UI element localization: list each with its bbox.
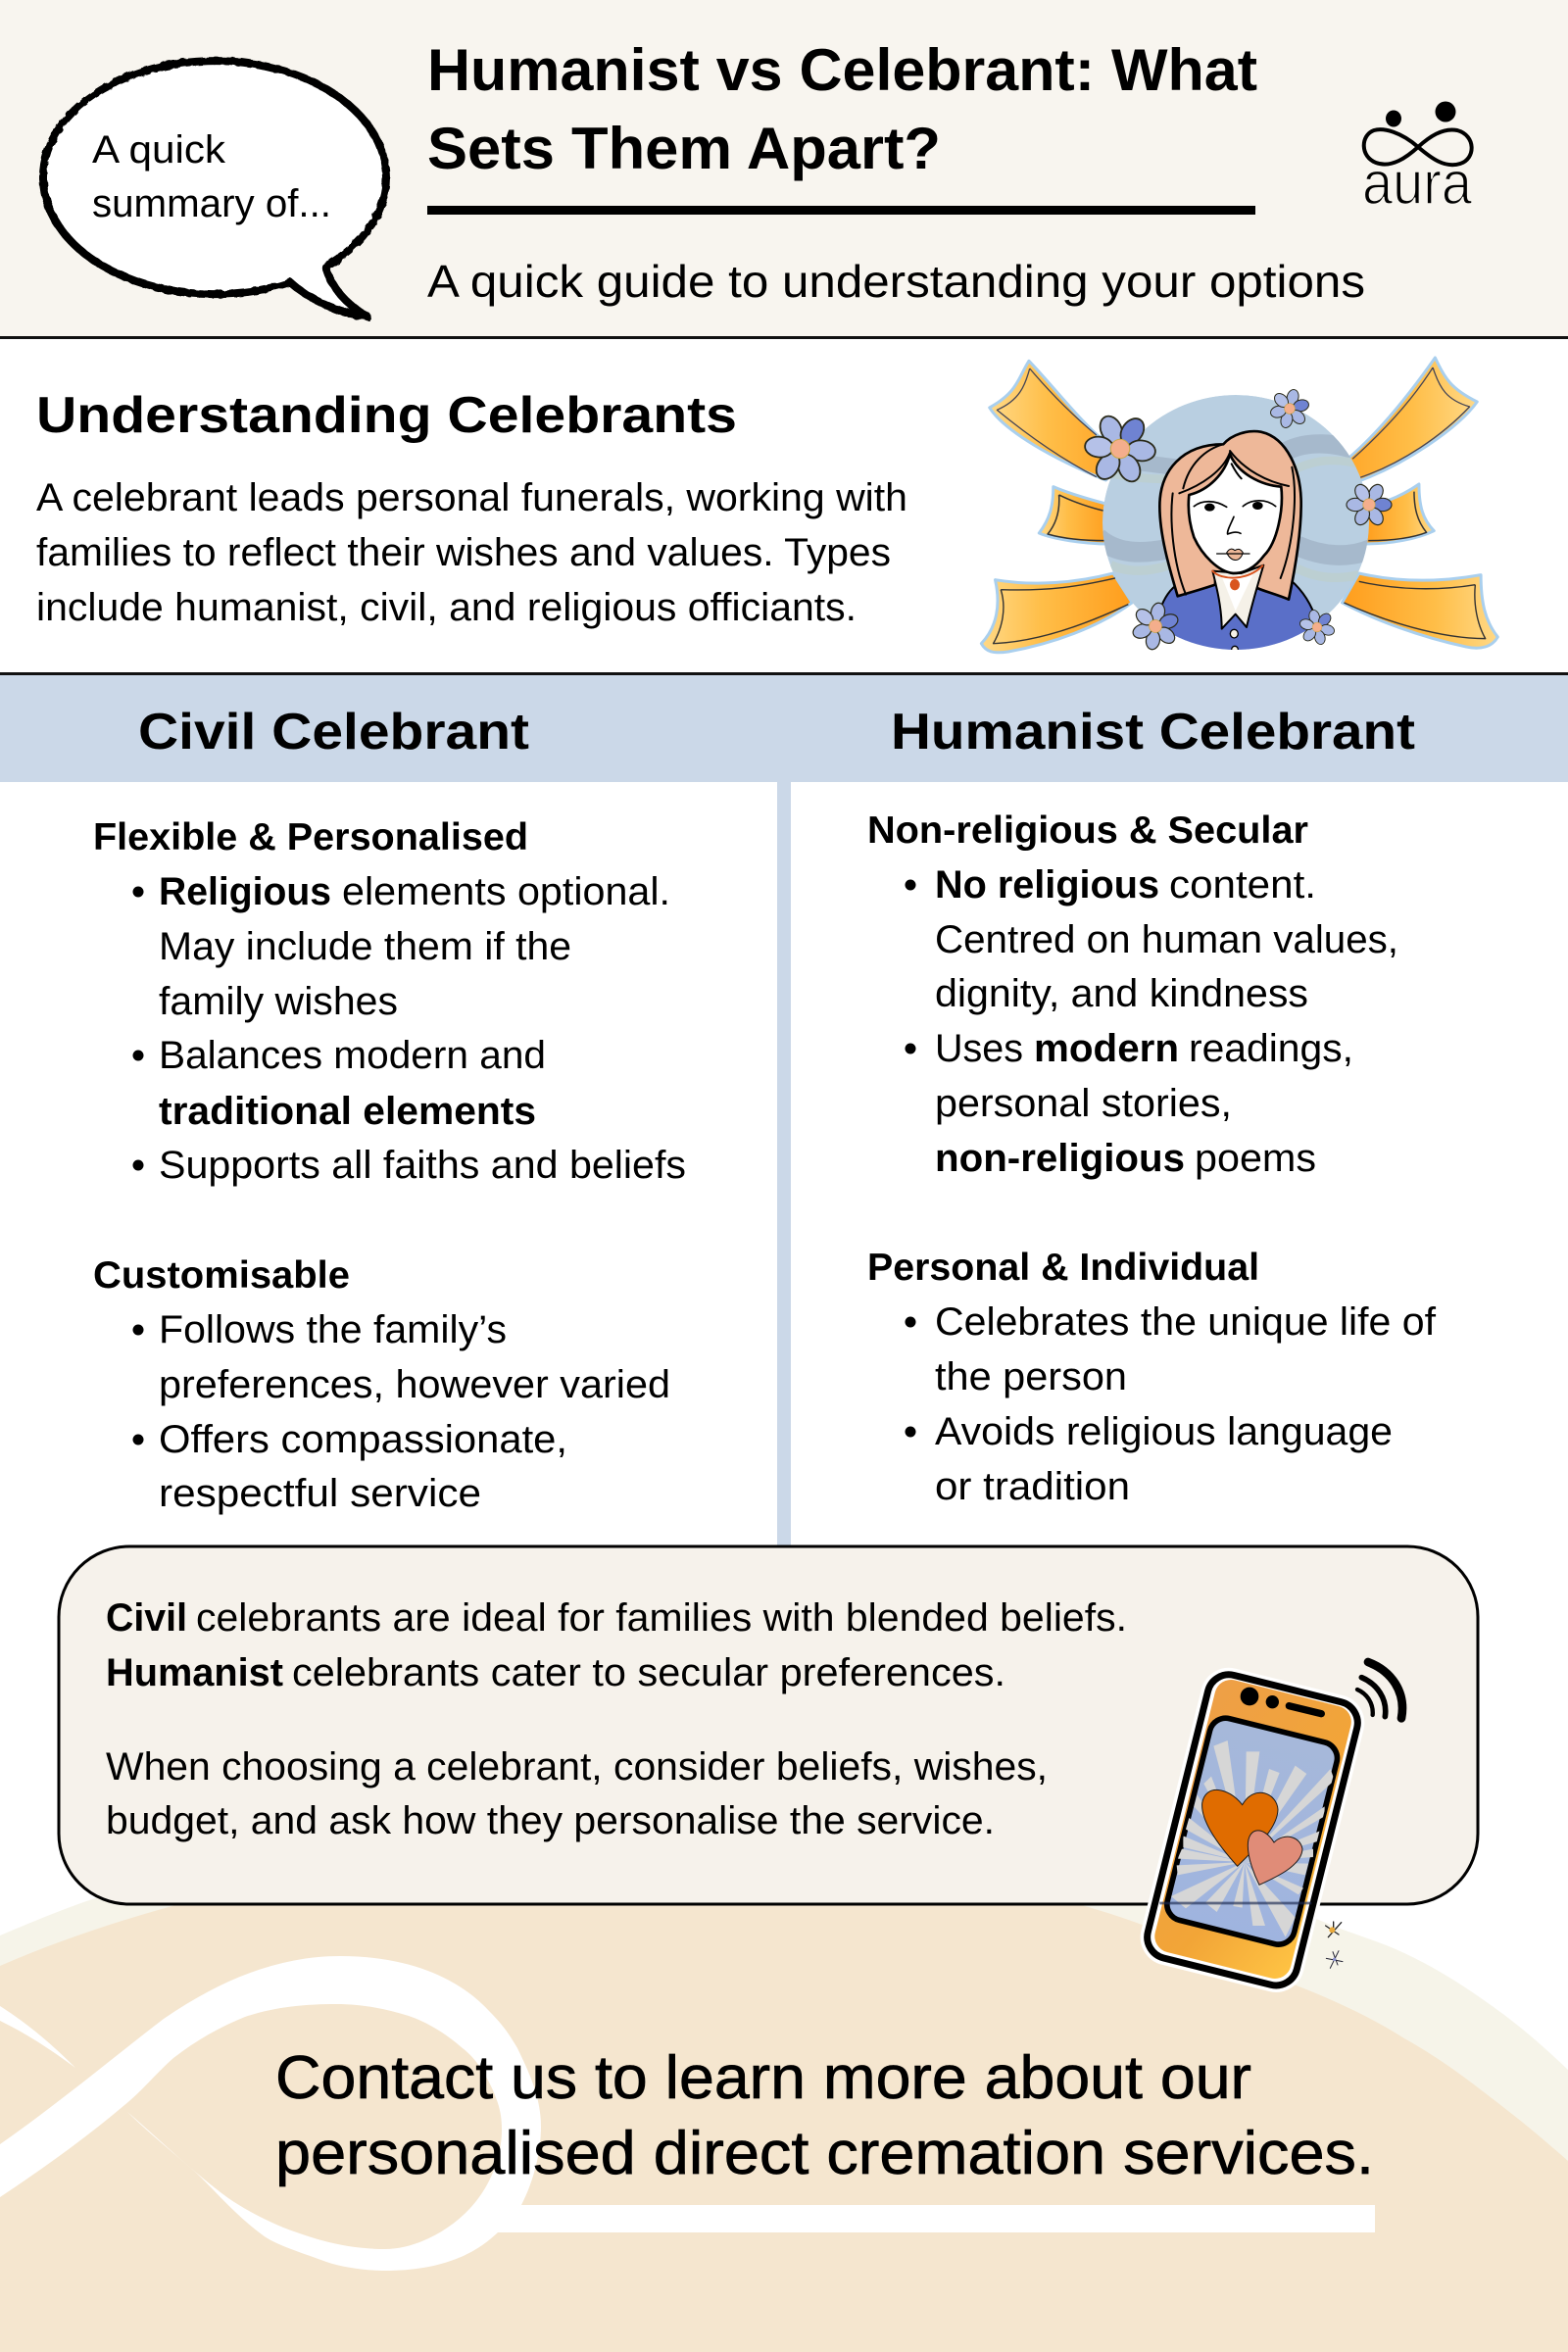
panel: humanist celebrant: non-religious bbox=[935, 1137, 1185, 1180]
portrait figure bbox=[1158, 429, 1313, 650]
panel: civil celebrant: Religious bbox=[159, 870, 331, 913]
call to action: personalised direct cremation services. bbox=[275, 2120, 1374, 2187]
panel: humanist celebrant: Centred on human values, bbox=[935, 918, 1398, 961]
illustration: celebrant portrait bbox=[981, 358, 1497, 666]
subtitle: A quick guide to understanding your options bbox=[427, 256, 1365, 307]
title: Sets Them Apart? bbox=[427, 116, 941, 181]
panel: civil celebrant: traditional elements bbox=[159, 1090, 536, 1133]
infinity ribbon bbox=[0, 1956, 1375, 2271]
panel: civil celebrant: Offers compassionate, bbox=[159, 1418, 567, 1461]
speech bubble: summary of... bbox=[92, 182, 331, 225]
intro paragraph: include humanist, civil, and religious officiants. bbox=[36, 586, 857, 629]
panel: humanist celebrant: modern bbox=[1034, 1027, 1179, 1070]
call to action bbox=[275, 2044, 1374, 2187]
callout: choosing a celebrant: celebrants cater to secular preferences. bbox=[292, 1651, 1005, 1694]
panel: humanist celebrant: Avoids religious language bbox=[935, 1410, 1393, 1453]
header divider bbox=[0, 336, 1568, 339]
panel: civil celebrant: preferences, however varied bbox=[159, 1363, 670, 1406]
panel: civil celebrant: Follows the family’s bbox=[159, 1308, 507, 1351]
flowers bbox=[1073, 384, 1400, 654]
panel: civil celebrant: Customisable bbox=[93, 1254, 350, 1297]
icon: smartphone with hearts bbox=[1143, 1662, 1402, 1990]
panel: humanist celebrant: poems bbox=[1195, 1137, 1316, 1180]
panel: humanist celebrant: readings, bbox=[1189, 1027, 1353, 1070]
panel: humanist celebrant: dignity, and kindness bbox=[935, 972, 1308, 1015]
footer background arcs bbox=[0, 1764, 1568, 2352]
callout line showing through screen bbox=[1159, 1899, 1311, 1907]
panel: civil celebrant: respectful service bbox=[159, 1472, 481, 1515]
column divider bbox=[777, 782, 791, 1546]
panel: civil celebrant: Supports all faiths and beliefs bbox=[159, 1144, 686, 1187]
intro paragraph bbox=[36, 476, 907, 629]
panel: civil celebrant: elements optional. bbox=[342, 870, 670, 913]
panel: civil celebrant: Balances modern and bbox=[159, 1034, 546, 1077]
call to action: Contact us to learn more about our bbox=[275, 2044, 1251, 2112]
panel: humanist celebrant: the person bbox=[935, 1355, 1127, 1398]
intro paragraph: A celebrant leads personal funerals, working with bbox=[36, 476, 907, 519]
title: Humanist vs Celebrant: What bbox=[427, 37, 1257, 103]
title rule bbox=[427, 206, 1255, 215]
sparkles bbox=[1326, 1922, 1343, 1968]
callout: choosing a celebrant: When choosing a celebrant, consider beliefs, wishes, bbox=[106, 1745, 1048, 1788]
panel: humanist celebrant: content. bbox=[1169, 863, 1316, 906]
panel: understanding celebrants bbox=[36, 358, 1497, 666]
speech bubble bbox=[43, 61, 386, 317]
callout: choosing a celebrant bbox=[59, 1546, 1478, 1904]
panel: humanist celebrant: Uses bbox=[935, 1027, 1023, 1070]
panel: humanist celebrant: No religious bbox=[935, 863, 1159, 906]
callout: choosing a celebrant: Civil bbox=[106, 1596, 187, 1640]
callout: choosing a celebrant: Humanist bbox=[106, 1651, 283, 1694]
logo: aura: aura bbox=[1362, 150, 1472, 218]
panel: civil celebrant: May include them if the bbox=[159, 925, 571, 968]
heading: civil celebrant: Civil Celebrant bbox=[138, 704, 529, 760]
section divider bbox=[0, 672, 1568, 675]
screen rays bbox=[1171, 1740, 1335, 1937]
signal arcs bbox=[1357, 1662, 1402, 1718]
panel: civil celebrant: family wishes bbox=[159, 980, 398, 1023]
phone body bbox=[1143, 1670, 1362, 1990]
hearts bbox=[1202, 1789, 1302, 1885]
panel: humanist celebrant: Celebrates the unique life of bbox=[935, 1300, 1437, 1344]
panel: civil celebrant: Flexible & Personalised bbox=[93, 816, 528, 858]
heading: Understanding Celebrants bbox=[36, 387, 737, 444]
ribbons bbox=[981, 358, 1497, 653]
backdrop circle bbox=[1098, 395, 1372, 666]
title bbox=[427, 37, 1257, 181]
comparison header band bbox=[0, 675, 1568, 782]
panel: humanist celebrant: personal stories, bbox=[935, 1082, 1232, 1125]
panel: humanist celebrant: Non-religious & Secular bbox=[867, 809, 1308, 852]
panel: humanist celebrant bbox=[867, 809, 1437, 1508]
heading: humanist celebrant: Humanist Celebrant bbox=[891, 704, 1415, 760]
panel: humanist celebrant: Personal & Individual bbox=[867, 1247, 1259, 1289]
callout: choosing a celebrant: budget, and ask how they personalise the service. bbox=[106, 1799, 995, 1842]
panel: civil celebrant bbox=[93, 816, 686, 1515]
callout: choosing a celebrant: celebrants are ideal for families with blended beliefs. bbox=[196, 1596, 1127, 1640]
speech bubble: A quick bbox=[92, 128, 226, 172]
camera and speaker bbox=[1241, 1688, 1321, 1714]
intro paragraph: families to reflect their wishes and values. Types bbox=[36, 531, 891, 574]
panel: header bbox=[0, 0, 1568, 336]
logo: aura bbox=[1362, 102, 1472, 218]
panel: humanist celebrant: or tradition bbox=[935, 1465, 1130, 1508]
